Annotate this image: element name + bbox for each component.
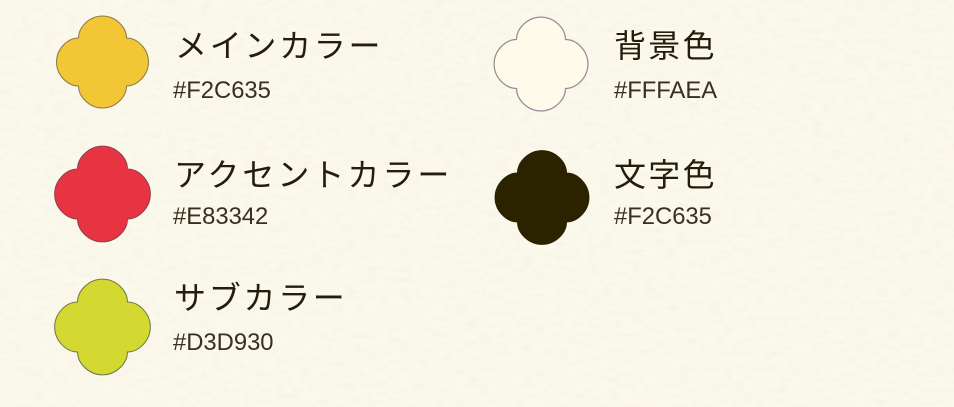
label: main colour hex: #F2C635: [173, 77, 271, 104]
swatch: sub colour: [55, 279, 348, 375]
icon: green quatrefoil: [55, 279, 150, 375]
label: sub colour hex: #D3D930: [173, 329, 274, 356]
label: main colour name: メインカラー: [175, 28, 383, 64]
swatch: text colour: [495, 151, 717, 244]
swatch: accent colour: [55, 146, 452, 242]
label: text colour name: 文字色: [614, 157, 717, 193]
icon: cream quatrefoil: [494, 17, 588, 111]
icon: dark quatrefoil: [495, 151, 589, 244]
label: background colour hex: #FFFAEA: [614, 77, 717, 104]
swatch: main colour: [56, 16, 383, 108]
label: text colour hex: #F2C635: [614, 203, 712, 230]
icon: yellow quatrefoil: [56, 16, 148, 108]
label: accent colour name: アクセントカラー: [174, 157, 452, 193]
swatch: background colour: [494, 17, 717, 111]
label: accent colour hex: #E83342: [173, 203, 268, 230]
icon: red quatrefoil: [55, 146, 150, 242]
label: sub colour name: サブカラー: [174, 280, 348, 316]
label: background colour name: 背景色: [614, 28, 717, 64]
